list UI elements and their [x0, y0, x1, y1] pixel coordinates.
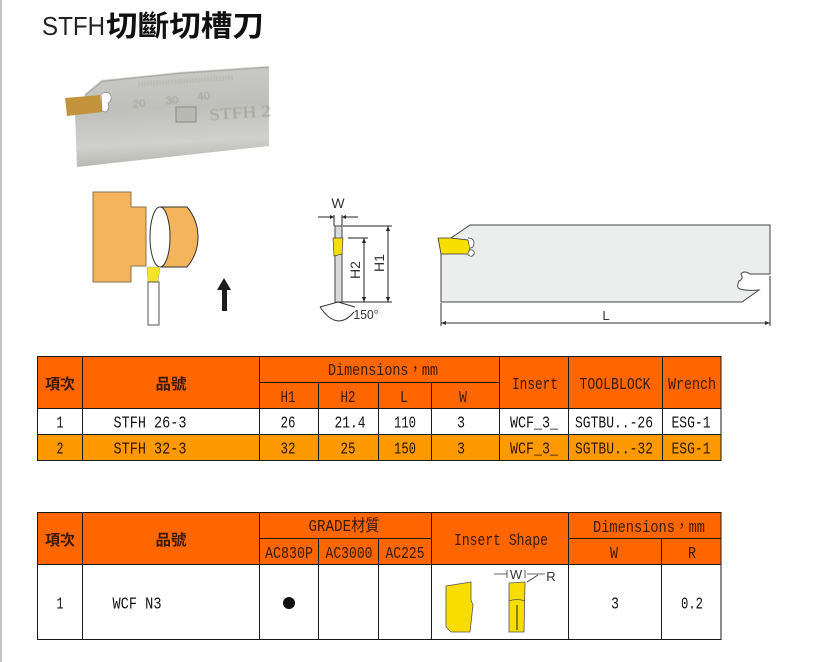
title: 切斷切槽刀: [106, 10, 264, 43]
ruler markings: 40: [197, 90, 211, 103]
table 1 row 1: [56, 414, 711, 432]
table 2 header: 品號: [156, 531, 186, 549]
ruler markings: 30: [165, 95, 179, 107]
photo: cut-off blade: [65, 67, 272, 167]
table: insert grades: [37, 512, 721, 640]
table 1 row 1: 3: [457, 414, 465, 432]
table 1 row 2: SGTBU..-32: [575, 440, 653, 458]
table 2 row: [56, 594, 703, 614]
table 1 row 2: 150: [394, 440, 416, 458]
table 1 header: H2: [340, 388, 356, 407]
table 2 row: 3: [611, 594, 619, 614]
label H2: H2: [347, 261, 363, 279]
table 2 header: Dimensions，mm: [593, 518, 705, 537]
title: [42, 10, 264, 43]
icon: insert shape drawings: R: [546, 569, 556, 584]
table 2 header: AC225: [386, 544, 424, 563]
table 2 row: WCF N3: [112, 594, 162, 614]
table 1 row 2: ESG-1: [672, 440, 711, 458]
table 1 header: L: [400, 388, 408, 407]
icon: insert shape drawings: [446, 567, 556, 632]
label H1: H1: [371, 254, 387, 272]
icon: insert shape drawings: W: [510, 567, 523, 582]
table 2 row: 1: [56, 594, 64, 614]
table 2 header: AC3000: [326, 544, 372, 563]
diagram: front view with dimensions: [318, 195, 392, 322]
icon: yellow insert: [438, 238, 470, 254]
table 2 header: Insert Shape: [454, 531, 548, 550]
table 2 header: W: [610, 544, 618, 563]
icon: yellow insert tip: [333, 238, 343, 256]
table 1 row 1: SGTBU..-26: [575, 414, 653, 432]
table 1 row 2: WCF_3_: [510, 440, 558, 458]
table 1 row 1: 21.4: [334, 414, 366, 432]
icon: yellow insert: [147, 267, 160, 282]
table 1 row 2: 2: [56, 440, 64, 458]
title: STFH: [42, 11, 105, 41]
table 2 header: R: [688, 544, 696, 563]
grade marker dot: [283, 597, 295, 609]
table 1 row 1: ESG-1: [672, 414, 711, 432]
table 1 row 2: 32: [280, 440, 296, 458]
dimension L: L: [602, 308, 610, 323]
table 1 header: [45, 361, 716, 407]
table 1 header: Dimensions，mm: [328, 361, 438, 380]
table 2 header: GRADE材質: [308, 516, 380, 536]
table 1 row 2: 25: [340, 440, 356, 458]
diagram: workpiece and parting blade: [93, 192, 231, 325]
table 1 header: H1: [280, 388, 296, 407]
ruler markings: [131, 75, 272, 130]
table 2 row: 0.2: [681, 594, 703, 614]
table 2 header: [45, 516, 705, 563]
label W: W: [331, 195, 345, 211]
table: holder dimensions: [37, 356, 721, 460]
table 2 header: AC830P: [265, 544, 313, 563]
table 1 header: Insert: [512, 375, 558, 394]
ruler markings: 20: [132, 98, 146, 111]
table 1 row 1: 110: [394, 414, 416, 432]
table 1 row 2: STFH 32-3: [114, 440, 186, 458]
table 1 row 1: WCF_3_: [510, 414, 558, 432]
table 1 row 1: 1: [56, 414, 64, 432]
ruler markings: STFH 2: [208, 101, 272, 124]
table 1 header: 品號: [156, 375, 186, 393]
table 1 header: 項次: [45, 375, 75, 393]
diagram: side view of blade: [438, 225, 770, 326]
label 150 degrees: 150°: [354, 307, 378, 322]
table 1 header: Wrench: [668, 375, 716, 394]
table 1 row 2: [56, 440, 711, 458]
table 2 header: 項次: [45, 531, 75, 549]
table 1 header: TOOLBLOCK: [580, 375, 651, 394]
table 1 header: W: [459, 388, 467, 407]
icon: feed arrow: [217, 278, 231, 311]
table 1 row 1: STFH 26-3: [114, 414, 186, 432]
table 1 row 1: 26: [280, 414, 296, 432]
icon: gold insert: [65, 95, 102, 116]
table 1 row 2: 3: [457, 440, 465, 458]
dimension L: [441, 276, 770, 326]
